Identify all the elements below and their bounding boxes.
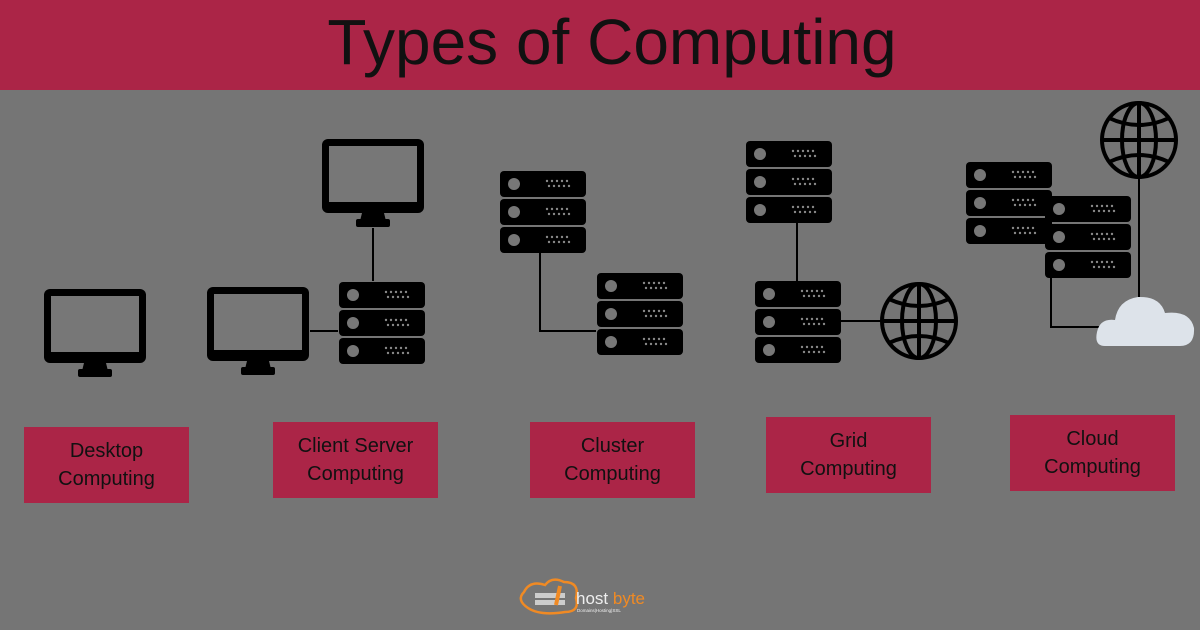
- logo: Domains|Hosting|SSL: [577, 608, 621, 613]
- label: cloud: Computing: [1044, 456, 1141, 478]
- label: grid: Grid: [830, 430, 867, 452]
- label: cloud: [1010, 415, 1175, 491]
- icon: desktop monitor: [44, 289, 146, 377]
- logo: host byte: [576, 589, 645, 608]
- connector lines: [310, 178, 1139, 331]
- title band: [0, 0, 1200, 90]
- icon: cluster: [500, 171, 683, 355]
- label: cloud: Cloud: [1066, 428, 1119, 450]
- label: grid: [766, 417, 931, 493]
- label: cluster: Computing: [564, 463, 661, 485]
- label: grid: Computing: [800, 458, 897, 480]
- label: cluster: [530, 422, 695, 498]
- label: client server: Computing: [307, 463, 404, 485]
- icon: grid: [746, 141, 956, 363]
- label: desktop: Desktop: [70, 440, 143, 462]
- label: client server: [273, 422, 438, 498]
- logo: [521, 580, 645, 613]
- title: Types of Computing: [327, 6, 897, 78]
- icon: cloud: [966, 103, 1194, 346]
- label: desktop: Computing: [58, 468, 155, 490]
- label: client server: Client Server: [298, 435, 413, 457]
- label: cluster: Cluster: [581, 435, 644, 457]
- label: desktop: [24, 427, 189, 503]
- icon: client server: [207, 139, 425, 375]
